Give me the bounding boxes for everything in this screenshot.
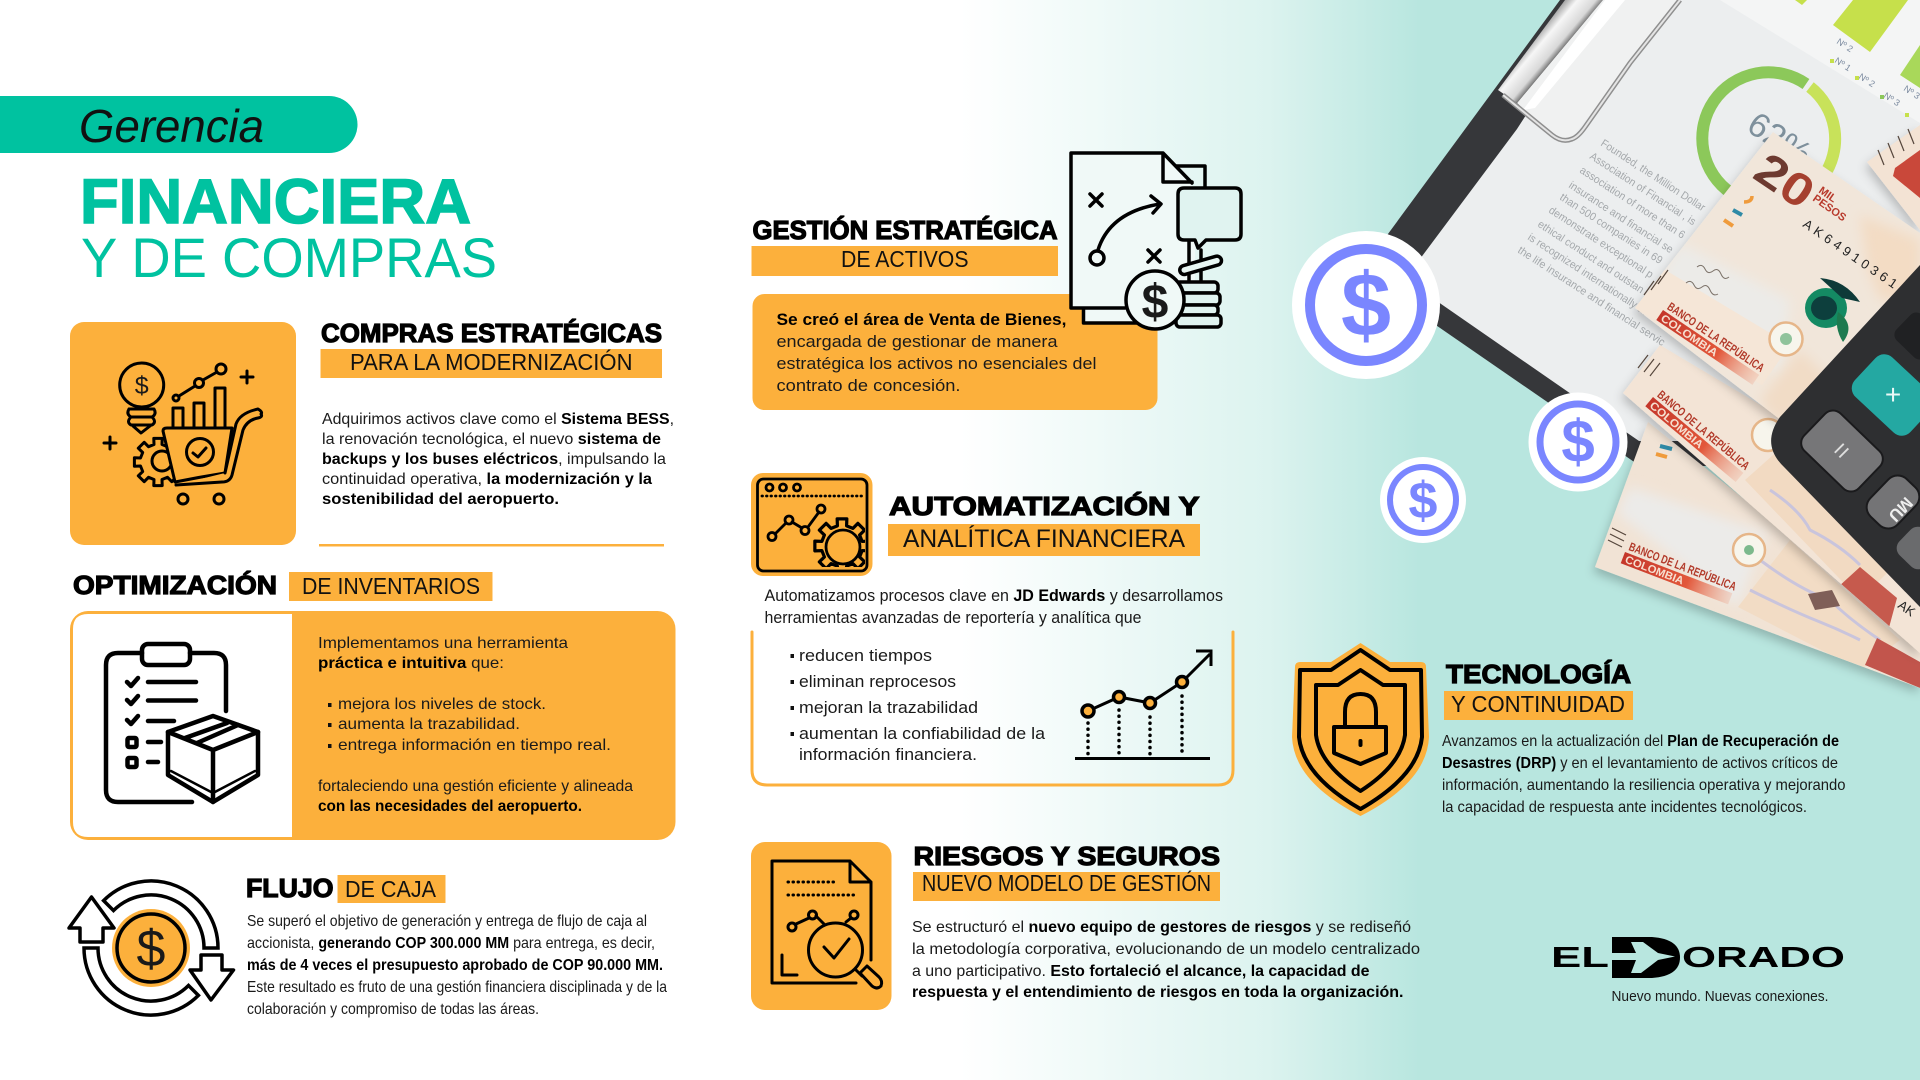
body text <box>247 913 667 1018</box>
percentage label: 62% <box>1741 105 1818 174</box>
icon: shopping cart with idea <box>104 363 262 504</box>
open frame <box>752 632 1233 785</box>
heading: COMPRAS ESTRATÉGICAS <box>321 318 662 348</box>
framed card <box>70 611 676 840</box>
body text: respuesta y el entendimiento de riesgos en toda la organización. <box>912 984 1404 1001</box>
chart legend: Nº 3 <box>1882 90 1902 108</box>
title: FINANCIERA <box>80 167 471 237</box>
chart legend: Nº 1 <box>1833 55 1853 73</box>
chart legend: Nº 2 <box>1835 36 1855 54</box>
marks <box>1733 210 1742 215</box>
icon: cash flow: $ <box>137 920 166 978</box>
body text: Se creó el área de Venta de Bienes, <box>776 310 1066 329</box>
icon: strategy document with coins <box>1071 153 1241 329</box>
body text: estratégica los activos no esenciales del <box>776 354 1096 373</box>
header pill <box>0 96 358 153</box>
key memory: MU <box>1885 493 1917 525</box>
heading: OPTIMIZACIÓN <box>73 570 277 600</box>
body text: Se superó el objetivo de generación y entrega de flujo de caja al <box>247 913 647 930</box>
banknote bottom: COLOMBIA <box>1623 554 1685 587</box>
icon card <box>751 842 892 1010</box>
paper text: demonstrate exceptional p <box>1546 204 1655 281</box>
body text: fortaleciendo una gestión eficiente y alineada <box>318 778 633 795</box>
banknote top right <box>1867 125 1920 230</box>
panel: automatización y analítica <box>751 473 1233 785</box>
icon: document with magnifier <box>772 861 882 988</box>
paper text: is recognized internationally as the se <box>1525 231 1677 336</box>
extra keys <box>1891 309 1920 573</box>
logo: El Dorado <box>1551 937 1845 1005</box>
band text <box>1656 298 1768 386</box>
bullet list: mejoran la trazabilidad <box>799 698 978 717</box>
subheading bar: PARA LA MODERNIZACIÓN <box>350 349 632 375</box>
body text: colaboración y compromiso de todas las áreas. <box>247 1001 539 1018</box>
body text: Implementamos una herramienta <box>318 635 568 652</box>
body text: Avanzamos en la actualización del Plan de Recuperación de <box>1442 733 1839 750</box>
paper text: Founded, the Million Dollar <box>1598 137 1707 214</box>
icon: cash flow <box>69 881 234 1015</box>
chart legend <box>1830 36 1920 117</box>
subheading bar: DE CAJA <box>345 876 437 902</box>
donut chart on paper <box>1702 72 1835 193</box>
coin icon large: $ <box>1341 256 1391 356</box>
body text: Se estructuró el nuevo equipo de gestores de riesgos y se rediseñó <box>912 919 1411 936</box>
body text: práctica e intuitiva que: <box>318 655 504 672</box>
key plus <box>1847 349 1920 441</box>
panel: tecnología y continuidad <box>1292 643 1846 816</box>
panel: gestión estratégica de activos: $ <box>1142 276 1169 329</box>
body text: backups y los buses eléctricos, impulsando la <box>322 451 666 468</box>
banknote middle: COLOMBIA <box>1647 400 1705 451</box>
coin icon medium <box>1528 392 1628 492</box>
subheading bar: Y CONTINUIDAD <box>1451 691 1625 717</box>
heading: RIESGOS Y SEGUROS <box>914 841 1220 871</box>
banknote bottom: BANCO DE LA REPÚBLICA <box>1627 539 1739 594</box>
key memory <box>1861 470 1920 535</box>
calculator <box>1771 265 1920 607</box>
subheading bar <box>752 246 1058 276</box>
heading: AUTOMATIZACIÓN Y <box>889 491 1200 521</box>
key equals: = <box>1825 434 1857 466</box>
pill label: Gerencia <box>79 100 264 152</box>
panel: optimización de inventarios <box>70 570 676 840</box>
icon: dashboard with gear <box>758 479 869 573</box>
coin icon large <box>1292 231 1440 379</box>
body text <box>912 919 1420 1001</box>
clip plate <box>1517 0 1680 140</box>
coin icon small: $ <box>1409 472 1438 530</box>
body text: con las necesidades del aeropuerto. <box>318 798 582 815</box>
bullet list: información financiera. <box>799 745 977 764</box>
body text: la capacidad de respuesta ante incidentes tecnológicos. <box>1442 799 1807 816</box>
body text <box>318 635 633 815</box>
banknote bottom <box>1595 422 1920 688</box>
paper text: ethical conduct and outstan <box>1535 218 1646 296</box>
paper text <box>1515 137 1707 349</box>
banknote main twenty: MIL <box>1816 185 1839 205</box>
body text: contrato de concesión. <box>776 376 960 395</box>
body text: a uno participativo. Esto fortaleció el alcance, la capacidad de <box>912 963 1370 980</box>
subheading bar: NUEVO MODELO DE GESTIÓN <box>922 870 1211 896</box>
body text: Desastres (DRP) y en el levantamiento de activos críticos de <box>1442 755 1838 772</box>
body text <box>322 411 674 508</box>
body text: accionista, generando COP 300.000 MM para entrega, es decir, <box>247 935 655 952</box>
body text: aumenta la trazabilidad. <box>338 716 520 733</box>
icon card <box>70 322 296 545</box>
heading: GESTIÓN ESTRATÉGICA <box>752 215 1058 245</box>
text card <box>752 294 1158 410</box>
body text: entrega información en tiempo real. <box>338 737 611 754</box>
bullet list: reducen tiempos <box>799 646 932 665</box>
denomination: 20 <box>1745 142 1824 219</box>
banknote middle: BANCO DE LA REPÚBLICA <box>1655 387 1753 473</box>
line chart icon <box>1075 651 1211 758</box>
paper text: Association of Financial , is <box>1587 150 1698 228</box>
heading: FLUJO <box>246 873 334 903</box>
bar chart fragments <box>1795 0 1920 88</box>
banknote middle <box>1623 345 1920 653</box>
clipboard paper <box>1405 0 1920 441</box>
body text <box>776 310 1096 395</box>
body text: la metodología corporativa, evolucionando de un modelo centralizado <box>912 941 1420 958</box>
second page edge <box>1720 0 1920 123</box>
paper text: association of more than 6 <box>1577 164 1687 242</box>
chart legend: Nº 2 <box>1857 71 1877 89</box>
key plus: + <box>1885 379 1901 410</box>
intro text: Automatizamos procesos clave en JD Edwards y desarrollamos <box>764 586 1223 605</box>
clipboard board <box>1385 0 1920 466</box>
subheading bar: DE ACTIVOS <box>841 246 968 272</box>
heading: TECNOLOGÍA <box>1446 659 1631 689</box>
body text: información, aumentando la resiliencia operativa y mejorando <box>1442 777 1846 794</box>
panel: gestión estratégica de activos <box>752 153 1241 410</box>
bullet list <box>790 646 1046 764</box>
coin icon medium: $ <box>1561 408 1595 475</box>
banknote middle: AK <box>1895 597 1918 620</box>
panel: compras estratégicas <box>70 318 674 545</box>
tagline: Nuevo mundo. Nuevas conexiones. <box>1612 989 1828 1005</box>
body text: sostenibilidad del aeropuerto. <box>322 491 559 508</box>
signatures <box>1686 265 1729 295</box>
body text <box>1442 733 1846 816</box>
bullet list: aumentan la confiabilidad de la <box>799 724 1046 743</box>
banknote main twenty: PESOS <box>1810 193 1848 224</box>
banknote main twenty <box>1632 132 1920 427</box>
clip <box>1498 0 1680 140</box>
panel: compras estratégicas: $ <box>135 372 149 400</box>
panel: riesgos y seguros <box>751 841 1420 1010</box>
band text: BANCO DE LA REPÚBLICA <box>1665 299 1768 375</box>
paper text: insurance and financial se <box>1566 179 1675 256</box>
icon: checklist with box <box>106 644 258 802</box>
logo: El Dorado: EL <box>1551 942 1609 974</box>
body text: mejora los niveles de stock. <box>338 696 546 713</box>
body text: Este resultado es fruto de una gestión financiera disciplinada y de la <box>247 979 667 996</box>
serial number: AK64910361 <box>1800 216 1900 291</box>
bullet list: eliminan reprocesos <box>799 672 956 691</box>
body text: encargada de gestionar de manera <box>776 332 1058 351</box>
band text: COLOMBIA <box>1658 313 1720 359</box>
intro text: herramientas avanzadas de reportería y analítica que <box>764 608 1142 627</box>
logo: El Dorado: ORADO <box>1682 942 1845 974</box>
icon: shield with padlock <box>1292 643 1429 816</box>
coin icon small <box>1380 457 1466 543</box>
paper text: the life insurance and financial servic <box>1515 244 1667 349</box>
subheading bar: DE INVENTARIOS <box>302 573 480 599</box>
subheading bar: ANALÍTICA FINANCIERA <box>903 524 1185 553</box>
body text: la renovación tecnológica, el nuevo sistema de <box>322 431 661 448</box>
panel: flujo de caja <box>69 873 667 1018</box>
key equals <box>1797 406 1887 496</box>
title <box>80 167 497 289</box>
body text: Adquirimos activos clave como el Sistema BESS, <box>322 411 674 428</box>
paper text: than 500 companies in 69 <box>1557 191 1665 267</box>
body text: continuidad operativa, la modernización y la <box>322 471 652 488</box>
title: Y DE COMPRAS <box>81 226 497 289</box>
body text: más de 4 veces el presupuesto aprobado de COP 90.000 MM. <box>247 957 663 974</box>
security seal <box>1770 322 1802 356</box>
photo: clipboard, banknotes and calculator <box>1385 0 1920 688</box>
intro text <box>764 586 1223 627</box>
turtle hologram <box>1805 278 1860 342</box>
icon card <box>751 473 872 576</box>
